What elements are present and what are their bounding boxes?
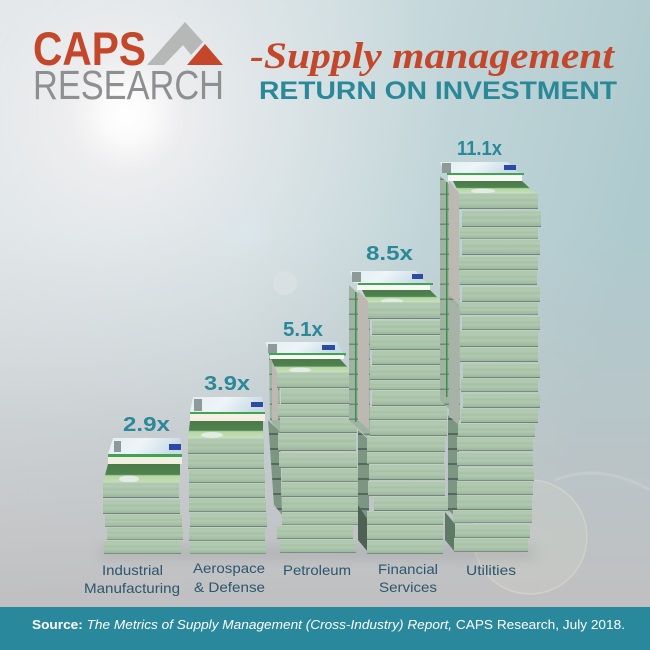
source citation: Source: The Metrics of Supply Management (Cross-Industry) Report, CAPS Research, July 2018. bbox=[32, 617, 625, 632]
logo: CAPS Research bbox=[33, 22, 224, 108]
stack: Financial Services bbox=[349, 271, 451, 554]
floor shadow bbox=[100, 548, 535, 558]
value labels bbox=[123, 138, 502, 436]
label: Financial Services bbox=[378, 561, 438, 595]
chart: money stacks bbox=[103, 162, 541, 554]
label: Financial Services: Financial bbox=[378, 561, 438, 577]
stack: Aerospace and Defense bbox=[188, 397, 267, 554]
label: Aerospace and Defense bbox=[193, 560, 265, 595]
stack: Utilities bbox=[440, 162, 541, 552]
label: Industrial Manufacturing: Manufacturing bbox=[84, 580, 180, 596]
value: 3.9x: 3.9x bbox=[204, 373, 250, 395]
label: Aerospace and Defense: Aerospace bbox=[193, 560, 265, 576]
category labels bbox=[84, 560, 516, 596]
logo icon: red peak bbox=[187, 44, 223, 65]
label: Aerospace and Defense: & Defense bbox=[194, 579, 265, 595]
title script line: -Supply management bbox=[250, 36, 616, 77]
value: 8.5x: 8.5x bbox=[366, 243, 413, 265]
label: Petroleum: Petroleum bbox=[283, 562, 351, 578]
value: 2.9x: 2.9x bbox=[123, 414, 170, 436]
footer band bbox=[0, 607, 650, 650]
label: Utilities: Utilities bbox=[466, 562, 516, 578]
value: 5.1x: 5.1x bbox=[283, 319, 323, 341]
stack: Petroleum bbox=[265, 342, 358, 553]
logo wordmark: CAPS: CAPS bbox=[33, 22, 146, 75]
value: 11.1x: 11.1x bbox=[457, 138, 502, 160]
logo icon: grey mountain bbox=[147, 22, 203, 65]
label: Industrial Manufacturing: Industrial bbox=[102, 562, 163, 578]
label: Industrial Manufacturing bbox=[84, 562, 180, 596]
title subtitle: RETURN ON INVESTMENT bbox=[259, 77, 617, 105]
stack: Industrial Manufacturing bbox=[103, 438, 183, 554]
label: Financial Services: Services bbox=[379, 579, 437, 595]
logo wordmark: Research: RESEARCH bbox=[33, 62, 224, 108]
title bbox=[250, 36, 617, 105]
